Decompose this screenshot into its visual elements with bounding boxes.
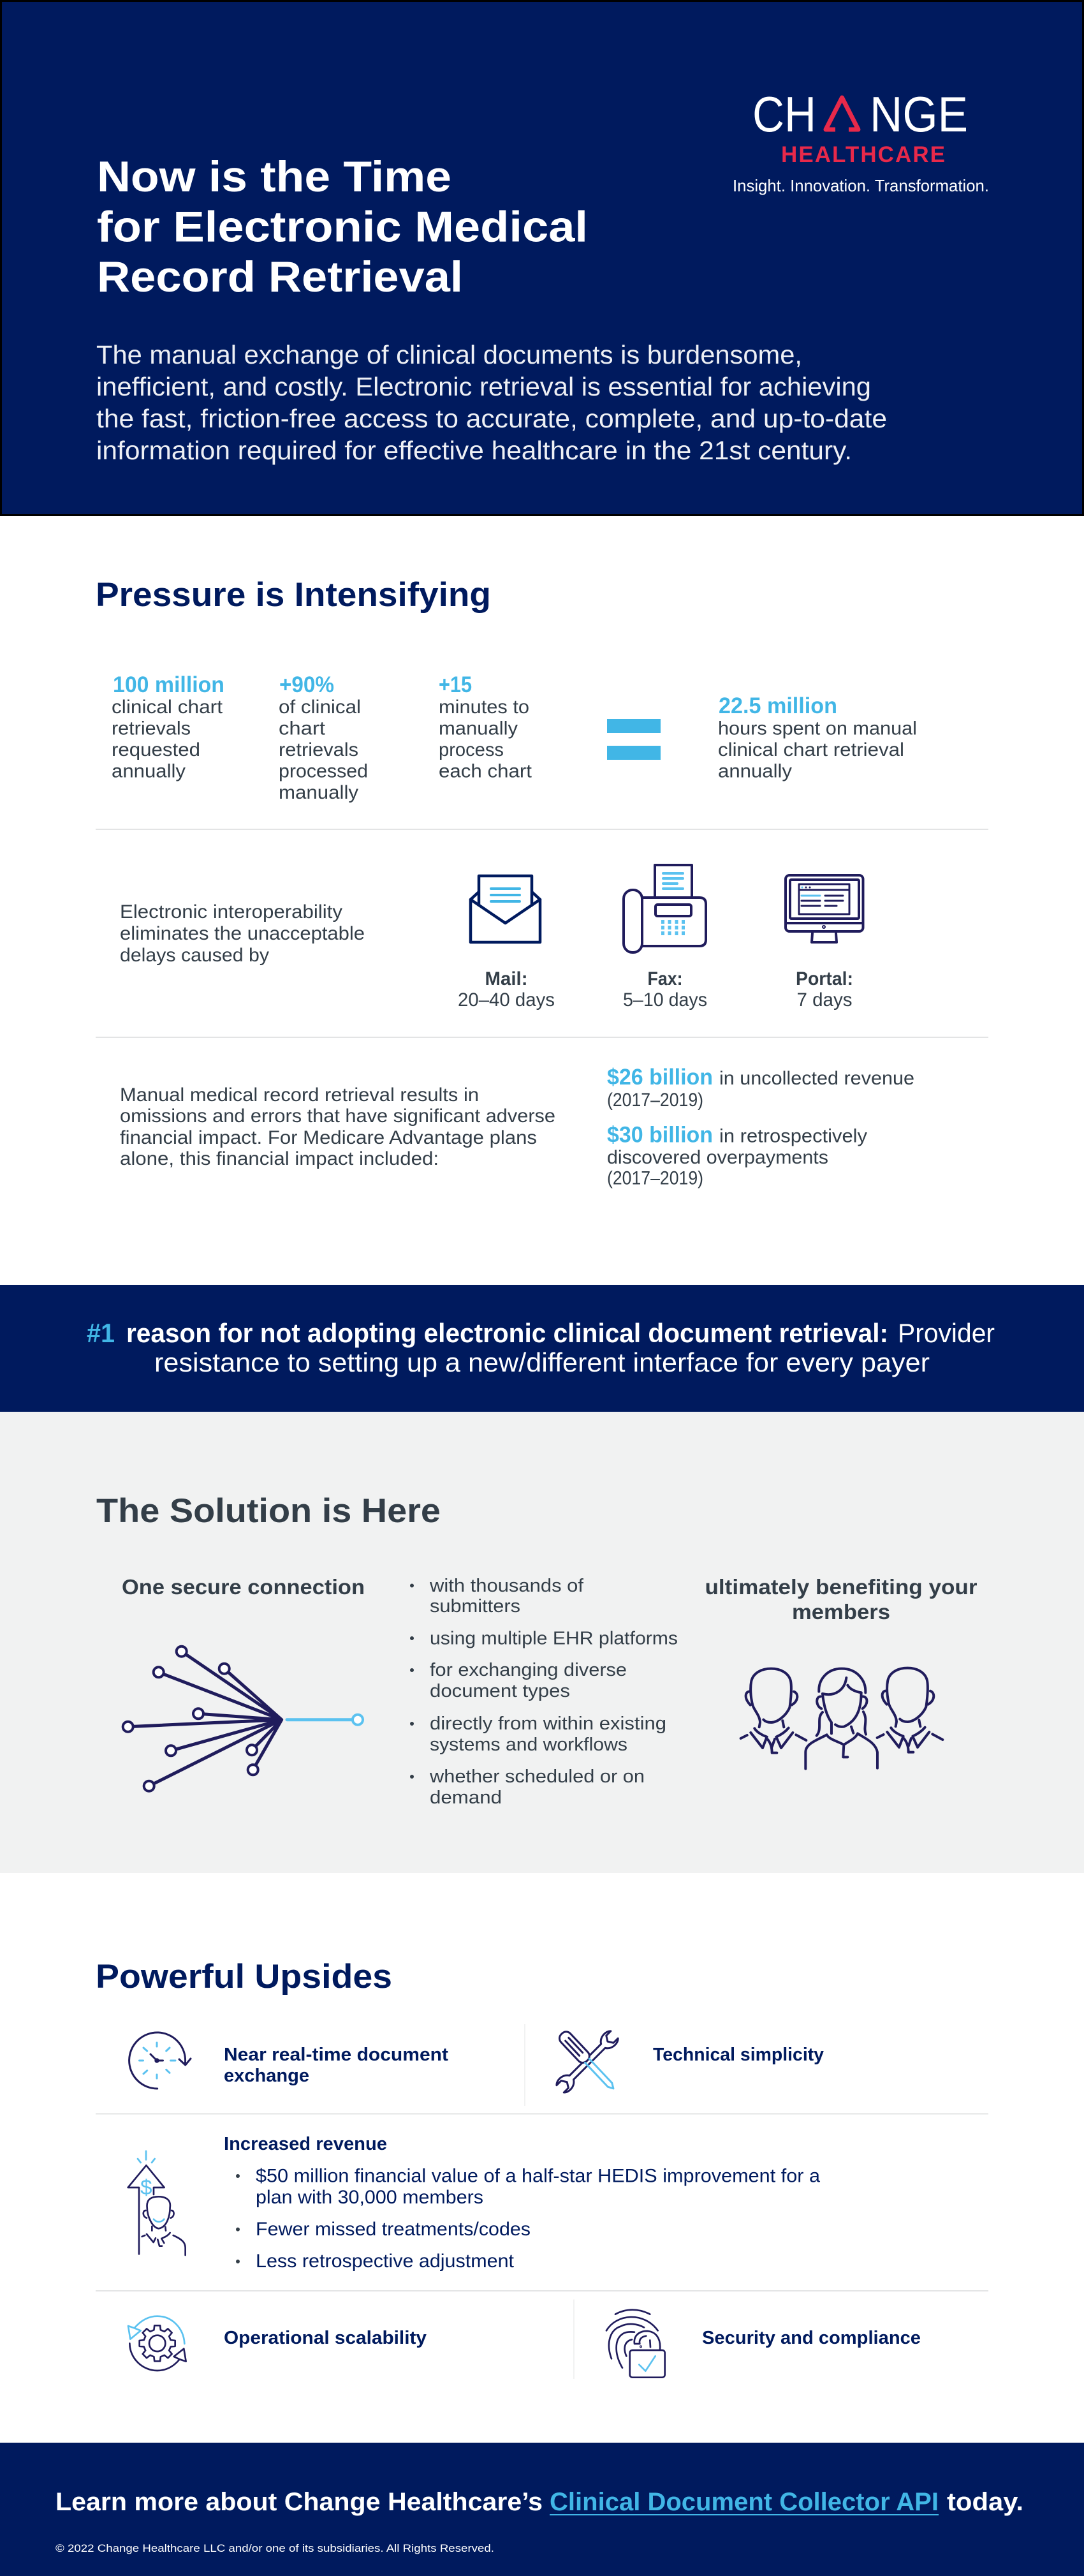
label: fax: Fax: (648, 968, 682, 989)
heading: Powerful Upsides: Powerful Upsides (96, 1958, 392, 1995)
banner: #1 reason: #1 (87, 1318, 115, 1348)
bullet list: revenue benefits: $50 million financial value of a half-star HEDIS improvement for a (256, 2166, 820, 2187)
stat: 22.5 million: clinical chart retrieval (718, 739, 904, 760)
icon: tools (555, 2029, 620, 2094)
label: fax (623, 968, 707, 1010)
banner: #1 reason: Provider (898, 1318, 995, 1348)
stat: 100 million: requested (112, 739, 200, 760)
stat: $26 billion (607, 1065, 914, 1111)
stat: $30 billion: discovered overpayments (607, 1147, 828, 1168)
label: portal: 7 days (797, 989, 852, 1010)
text: financial impact: financial impact. For Medicare Advantage plans (120, 1127, 537, 1148)
title: Now is the Time (97, 152, 451, 201)
logo: Change Healthcare: Insight. Innovation. Transformation. (733, 176, 989, 195)
bullet list: revenue benefits: Fewer missed treatments/codes (256, 2219, 531, 2240)
stat: $26 billion: (2017–2019) (607, 1090, 703, 1111)
bullet list: connection features: for exchanging diverse (430, 1660, 627, 1680)
bullet list: connection features: using multiple EHR platforms (430, 1628, 678, 1648)
icon: portal (786, 875, 863, 942)
upside: technical simplicity (555, 2029, 824, 2094)
logo: Change Healthcare: HEALTHCARE (781, 142, 945, 167)
heading: Pressure is Intensifying: Pressure is Intensifying (96, 576, 491, 614)
stat: +90%: processed (279, 760, 368, 782)
label: portal: Portal: (796, 968, 853, 989)
bullet list: connection features (410, 1576, 678, 1808)
banner: #1 reason (0, 1285, 1084, 1412)
stat: +90% (279, 672, 368, 803)
text: financial impact: alone, this financial impact included: (120, 1148, 439, 1169)
icon: revenue arrow: $ (140, 2176, 152, 2200)
stat: +15: minutes to (439, 697, 529, 718)
label: portal (796, 968, 853, 1010)
stat: 22.5 million: 22.5 million (719, 693, 837, 718)
text: financial impact: omissions and errors that have significant adverse (120, 1106, 555, 1127)
subheading: ultimately benefiting your members: ultimately benefiting your (705, 1575, 978, 1599)
heading: The Solution is Here: The Solution is Here (96, 1492, 441, 1530)
stat: 100 million: 100 million (113, 672, 224, 697)
panel: footer (0, 2443, 1084, 2576)
stat: +15: each chart (439, 760, 532, 782)
bullet list: revenue benefits: Less retrospective adjustment (256, 2251, 515, 2272)
bullet list: connection features: submitters (430, 1596, 520, 1617)
stat: 22.5 million (718, 693, 917, 782)
bullet list: revenue benefits: plan with 30,000 members (256, 2187, 483, 2208)
intro paragraph: information required for effective healthcare in the 21st century. (96, 436, 852, 465)
stat: $30 billion: in retrospectively (719, 1125, 867, 1147)
text: financial impact (120, 1084, 555, 1169)
panel: header (1, 1, 1083, 515)
title (97, 152, 588, 301)
stat: +90%: of clinical (279, 697, 361, 718)
bullet list: connection features: directly from within existing (430, 1714, 666, 1734)
icon: equals sign (607, 719, 661, 760)
text: financial impact: Manual medical record retrieval results in (120, 1084, 479, 1106)
stat: 22.5 million: annually (718, 760, 792, 782)
stat: $30 billion (607, 1123, 867, 1189)
stat: $26 billion: $26 billion (607, 1065, 713, 1090)
copyright: © 2022 Change Healthcare LLC and/or one of its subsidiaries. All Rights Reserved. (55, 2542, 494, 2554)
label: mail (458, 968, 555, 1010)
icon: mail (471, 876, 540, 942)
label: fax: 5–10 days (623, 989, 707, 1010)
intro paragraph: the fast, friction-free access to accurate, complete, and up-to-date (96, 404, 887, 433)
subheading: ultimately benefiting your members: members (792, 1600, 890, 1624)
stat: $30 billion: (2017–2019) (607, 1167, 703, 1189)
intro paragraph: The manual exchange of clinical documents is burdensome, (96, 340, 802, 369)
text: electronic interoperability (120, 901, 365, 966)
icon: members (741, 1668, 942, 1769)
upside: operational scalability (128, 2316, 427, 2371)
text: electronic interoperability: Electronic interoperability (120, 901, 342, 922)
bullet list: revenue benefits (236, 2166, 820, 2272)
bullet list: connection features: document types (430, 1681, 570, 1701)
stat: +15 (439, 672, 532, 782)
stat: +90%: chart (279, 718, 326, 739)
intro paragraph: inefficient, and costly. Electronic retrieval is essential for achieving (96, 372, 871, 401)
stat: +15: process (439, 739, 504, 760)
icon: fingerprint lock (606, 2310, 665, 2378)
stat: 100 million: retrievals (112, 718, 191, 739)
upside: near real-time document exchange: Near real-time document (224, 2045, 448, 2065)
bullet list: connection features: with thousands of (429, 1576, 584, 1596)
upside: increased revenue (128, 2134, 820, 2272)
banner: #1 reason: resistance to setting up a new/different interface for every payer (154, 1347, 930, 1377)
upside: increased revenue: Increased revenue (224, 2134, 387, 2154)
title: for Electronic Medical (97, 203, 588, 251)
call to action: Learn more about Change Healthcare’s (55, 2488, 543, 2516)
upside: near real-time document exchange: exchange (224, 2066, 309, 2086)
icon: gear cycle (128, 2316, 186, 2371)
upside: near real-time document exchange (129, 2032, 448, 2089)
upside: security and compliance (606, 2310, 921, 2378)
stat: $30 billion: $30 billion (607, 1123, 713, 1147)
stat: 100 million: annually (112, 760, 186, 782)
bullet list: connection features: whether scheduled or on (429, 1766, 645, 1787)
icon: network hub (123, 1647, 363, 1791)
icon: fax (624, 865, 706, 952)
bullet list: connection features: systems and workflows (430, 1735, 627, 1755)
logo: Change Healthcare (733, 86, 989, 195)
subheading: one secure connection: One secure connection (122, 1575, 365, 1599)
stat: 22.5 million: hours spent on manual (718, 718, 917, 739)
stat: +90%: manually (279, 782, 358, 803)
logo: Change Healthcare: NGE (870, 86, 968, 142)
label: mail: 20–40 days (458, 989, 555, 1010)
bullet list: connection features: demand (430, 1788, 502, 1808)
stat: 100 million: clinical chart (112, 697, 223, 718)
upside: security and compliance: Security and compliance (702, 2328, 921, 2348)
stat: +15: +15 (439, 672, 472, 697)
stat: +90%: +90% (279, 672, 334, 697)
call to action (55, 2488, 1023, 2516)
stat: 100 million (112, 672, 224, 782)
subheading: ultimately benefiting your members (705, 1575, 978, 1624)
banner: #1 reason: reason for not adopting electronic clinical document retrieval: (126, 1318, 888, 1348)
stat: +90%: retrievals (279, 739, 358, 760)
icon: clock (129, 2032, 191, 2089)
text: electronic interoperability: delays caused by (120, 945, 269, 966)
label: mail: Mail: (485, 968, 528, 989)
stat: $26 billion: in uncollected revenue (719, 1068, 914, 1089)
call to action: Clinical Document Collector API (550, 2488, 939, 2516)
upside: operational scalability: Operational scalability (224, 2328, 427, 2348)
intro paragraph (96, 340, 887, 465)
call to action: today. (947, 2488, 1023, 2516)
logo: Change Healthcare: CH (752, 86, 816, 142)
panel: the solution (0, 1412, 1084, 1873)
text: electronic interoperability: eliminates the unacceptable (120, 923, 365, 944)
stat: +15: manually (439, 718, 518, 739)
icon: revenue arrow (128, 2151, 186, 2255)
upside: technical simplicity: Technical simplicity (653, 2045, 824, 2065)
title: Record Retrieval (97, 253, 463, 301)
